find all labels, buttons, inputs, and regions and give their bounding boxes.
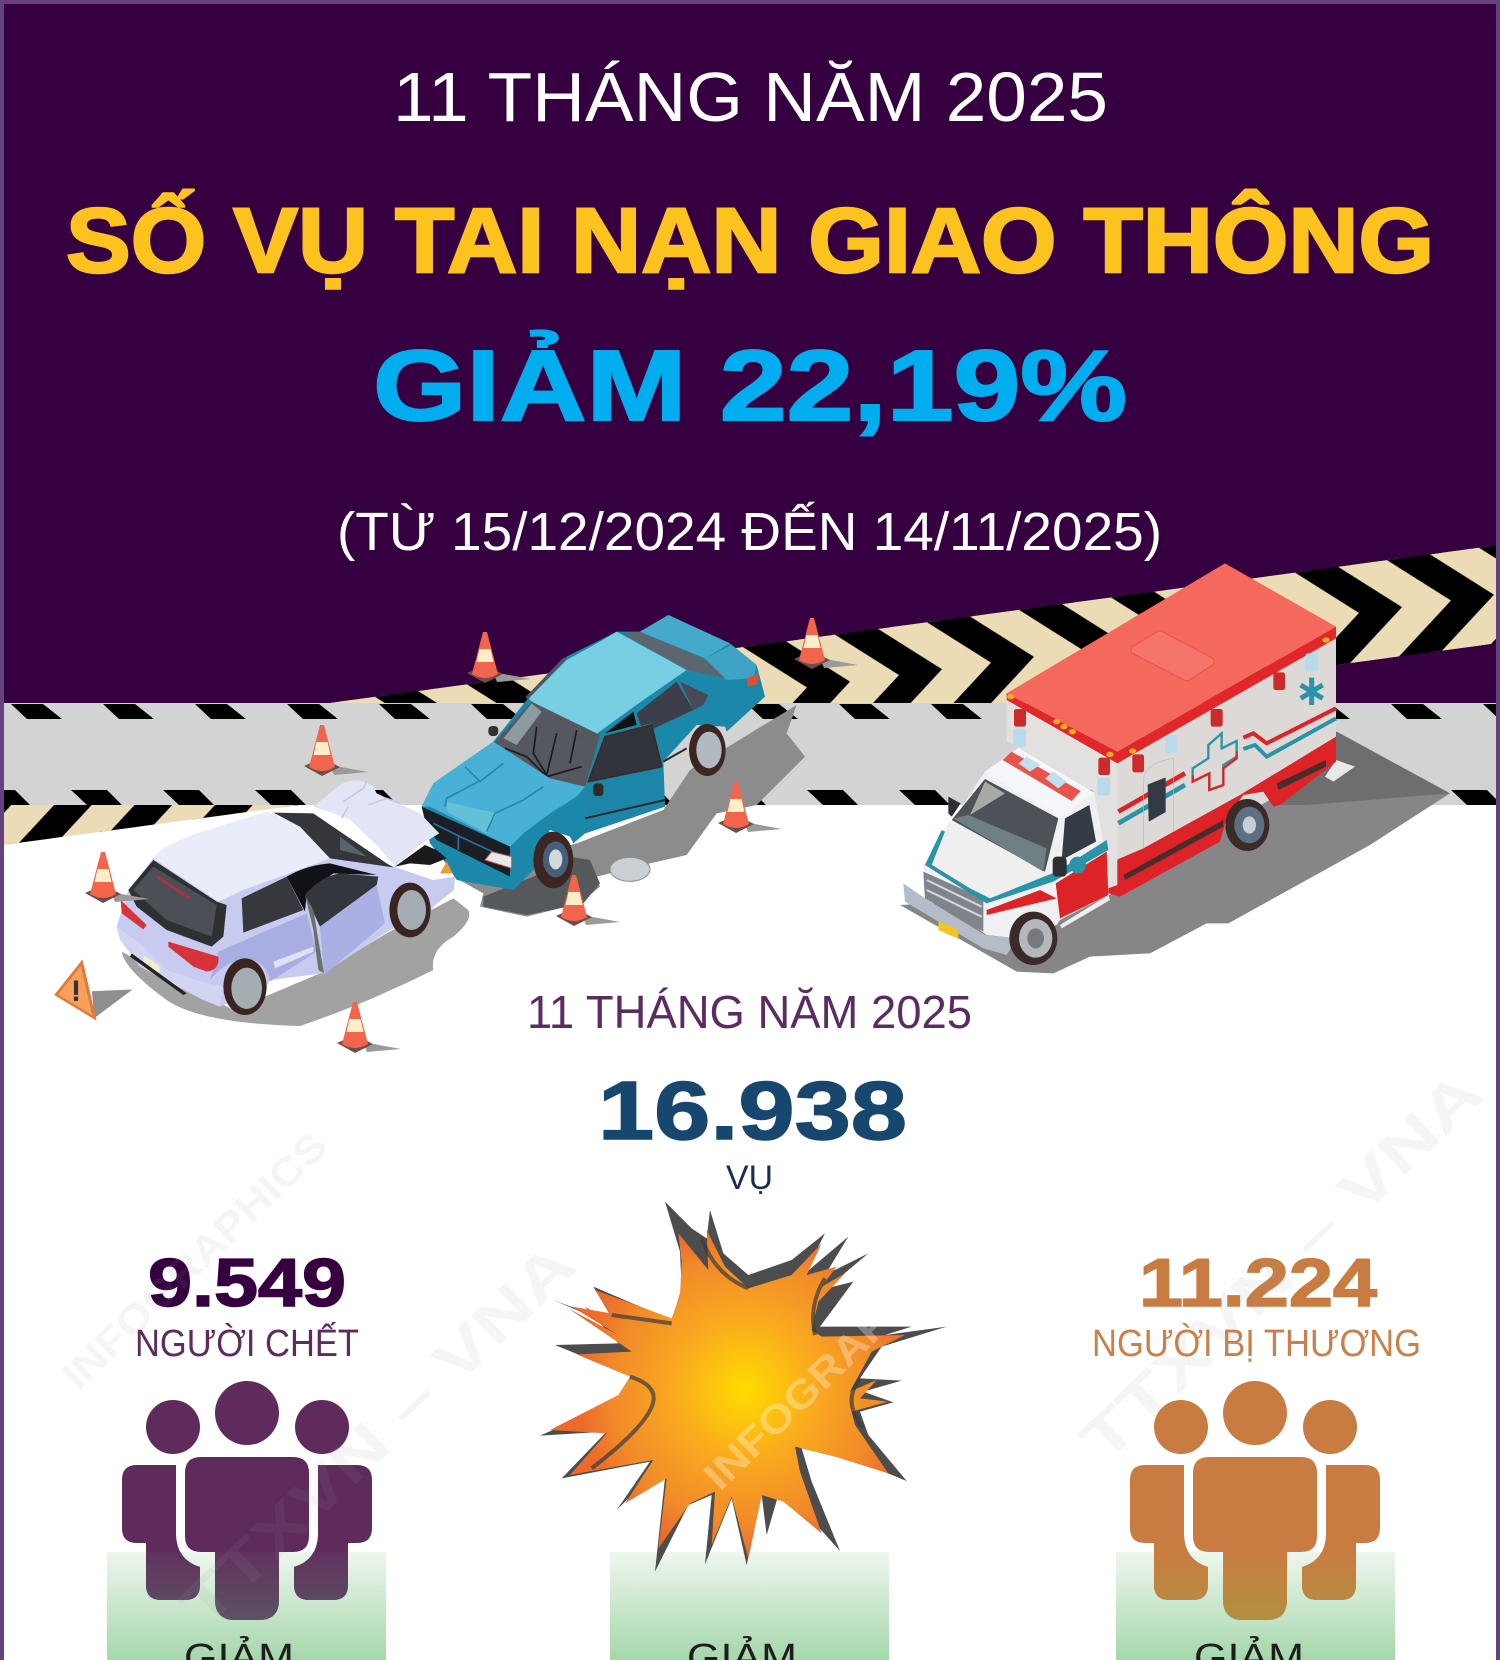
rear window [128, 860, 227, 947]
stat: number of accidents: 16.938 [598, 1064, 907, 1157]
watermarks: TTXVN – VNA [1067, 1058, 1495, 1474]
hatchback shadow [122, 898, 469, 1026]
icon: people, deaths [122, 1381, 372, 1620]
hood [422, 742, 585, 847]
sedan shadow [453, 705, 805, 917]
stat: deaths number: 9.549 [148, 1245, 346, 1321]
stat unit: VỤ [726, 1159, 773, 1197]
watermarks: TTXVN – VNA [167, 1230, 588, 1639]
stat: deaths label: NGƯỜI CHẾT [135, 1321, 359, 1365]
explosion inner shadow strokes [592, 1238, 863, 1468]
sedan body [422, 615, 765, 890]
header panel [0, 0, 1500, 703]
rear windows [637, 682, 693, 733]
cab [923, 748, 1108, 938]
box side [1117, 635, 1336, 888]
side lights and windows [1013, 653, 1318, 796]
ambulance shadow [900, 732, 1450, 973]
grille and headlight [422, 807, 510, 877]
ambulance wheels [1009, 912, 1057, 965]
side windows [242, 877, 303, 933]
watermarks [54, 1058, 1495, 1639]
side markings [1118, 678, 1336, 848]
panel: deaths change [107, 1552, 386, 1660]
title: date range: (TỪ 15/12/2024 ĐẾN 14/11/2025) [337, 502, 1162, 562]
title: main heading: SỐ VỤ TAI NẠN GIAO THÔNG [66, 189, 1434, 292]
windshield [952, 779, 1058, 872]
hatchback wheels [389, 883, 431, 937]
light bar [1003, 752, 1081, 801]
hood [923, 822, 1043, 898]
hatchback body [117, 812, 455, 1007]
roof [1007, 563, 1336, 752]
title: period: 11 THÁNG NĂM 2025 [393, 58, 1108, 136]
illustration: blue sedan [422, 615, 805, 917]
panel: injured change [1116, 1552, 1395, 1660]
roof [153, 812, 330, 902]
lights and plate [121, 900, 147, 929]
windshield [273, 813, 393, 867]
hubcap [610, 857, 650, 881]
watermarks: INFOGRAPHICS [54, 1124, 336, 1398]
icon: people, injured [1130, 1381, 1380, 1620]
cab stripes and door [1056, 852, 1108, 918]
amber markers [1007, 637, 1330, 757]
stat: injured number: 11.224 [1139, 1245, 1377, 1321]
open door [585, 723, 665, 833]
road band [0, 703, 1500, 805]
illustration: lavender hatchback [117, 780, 469, 1026]
windshield [493, 702, 600, 787]
open door [305, 873, 378, 927]
bumper and grille [903, 883, 1017, 955]
watermarks: INFOGRAPHICS [696, 1224, 978, 1498]
box front [1007, 695, 1117, 888]
title: percentage decrease: GIẢM 22,19% [373, 329, 1127, 442]
stat: injured label: NGƯỜI BỊ THƯƠNG [1092, 1322, 1421, 1365]
icon: warning triangle [56, 963, 133, 1018]
center label: period: 11 THÁNG NĂM 2025 [527, 986, 972, 1038]
chevron ribbon [0, 542, 1500, 848]
sedan wheels [533, 832, 573, 888]
panel: accidents change [610, 1552, 889, 1660]
illustration: ambulance [900, 563, 1450, 973]
raised hood [313, 780, 439, 867]
traffic cones [85, 618, 858, 1053]
icon: explosion [540, 1202, 947, 1572]
